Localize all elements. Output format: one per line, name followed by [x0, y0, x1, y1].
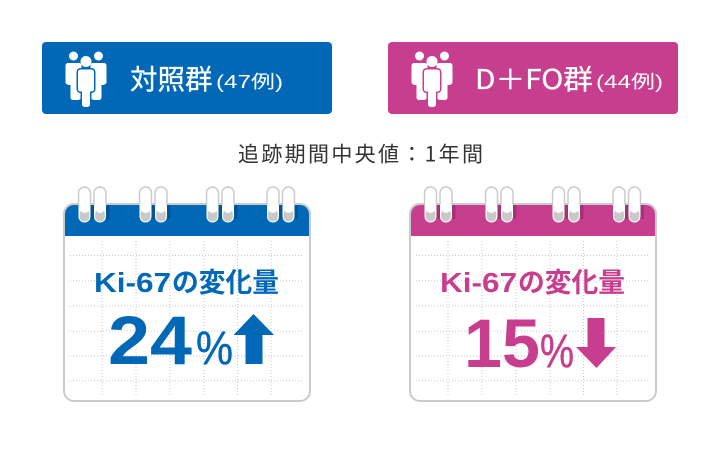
heading: Ki-67 change: Ki-67 — [440, 267, 517, 298]
heading: Ki-67 change — [440, 267, 625, 298]
value: 15 percent: 15 — [464, 305, 540, 382]
value: 24 percent: 24 — [108, 302, 192, 379]
arrow: down — [576, 318, 616, 368]
text: D+FO group count: (44例) — [596, 72, 663, 92]
text: control group count: (47例) — [216, 72, 283, 92]
percent sign: % — [196, 321, 233, 374]
panel: control calendar — [64, 187, 310, 401]
icon: D+FO group people — [412, 52, 452, 107]
text: median follow-up: 追跡期間中央値：1年間 — [238, 138, 483, 168]
calendar body — [410, 204, 656, 401]
calendar header — [411, 205, 655, 236]
heading: Ki-67 change: の変化量 — [518, 268, 625, 298]
panel: control group label — [42, 42, 332, 114]
calendar header — [65, 205, 309, 236]
arrow: up — [234, 314, 274, 364]
panel: D+FO calendar — [410, 187, 656, 401]
panel: D+FO group label — [388, 42, 678, 114]
heading: Ki-67 change — [94, 267, 279, 298]
calendar rings — [424, 187, 644, 222]
percent sign: % — [540, 324, 574, 377]
heading: D+FO group: D＋FO群 — [475, 57, 593, 97]
icon: control group people — [66, 52, 106, 107]
calendar body — [64, 204, 310, 401]
heading: Ki-67 change: Ki-67 — [94, 267, 171, 298]
calendar rings — [78, 187, 298, 222]
heading: Ki-67 change: の変化量 — [172, 268, 279, 298]
heading: control group: 対照群 — [130, 57, 212, 97]
